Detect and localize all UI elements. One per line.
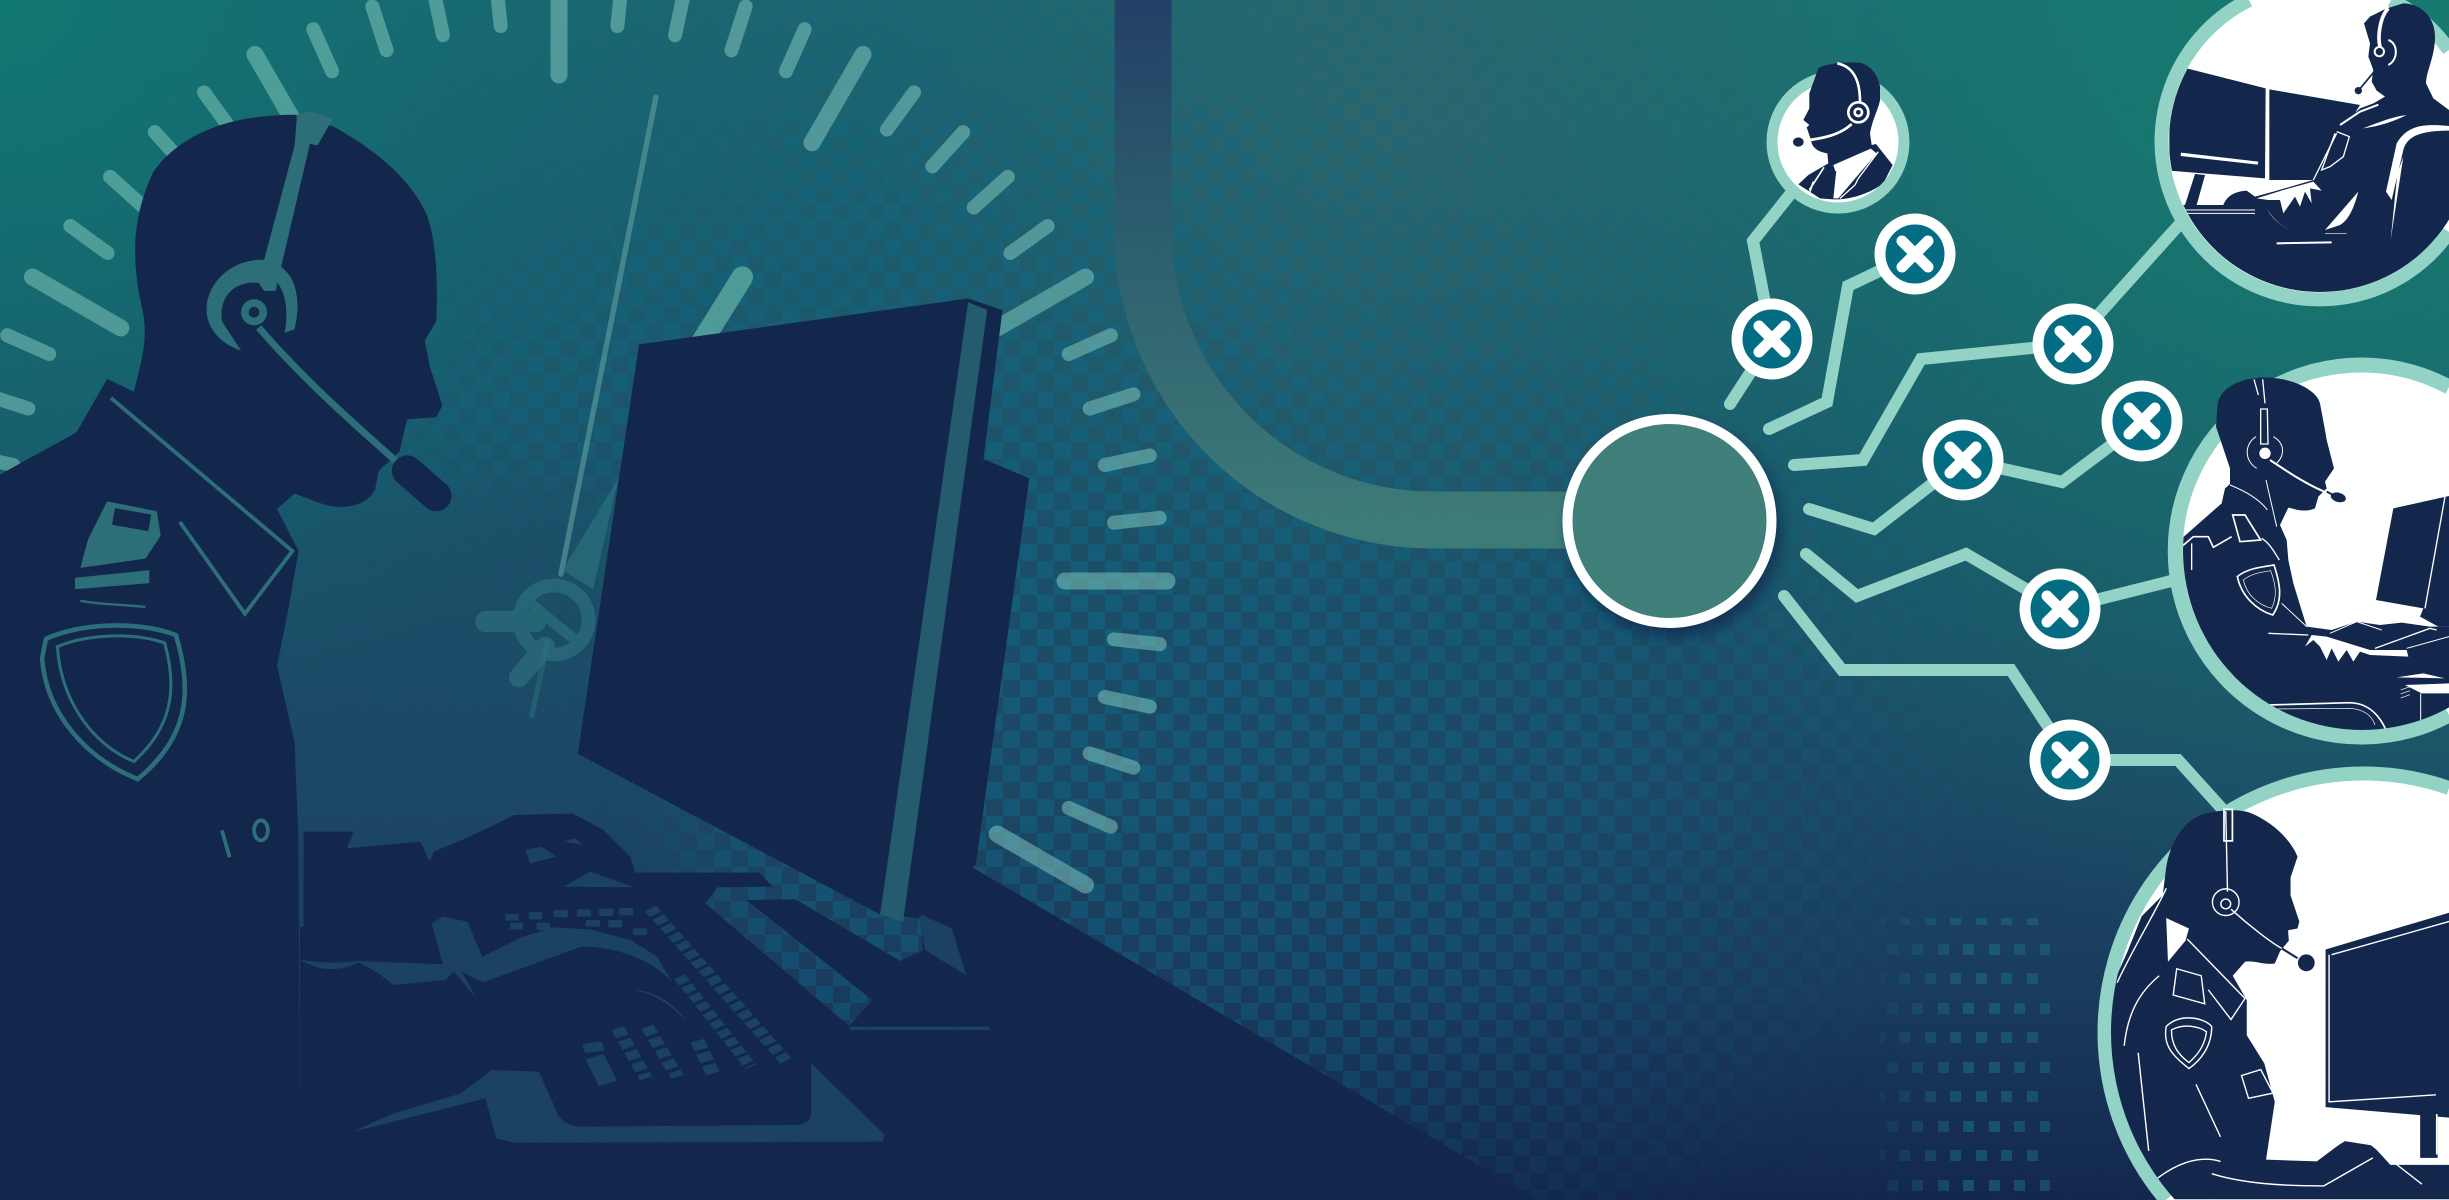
marker 7	[2035, 725, 2105, 795]
keyboard keys	[505, 908, 647, 935]
central hub circle	[1568, 419, 1782, 637]
halftone pattern	[500, 150, 2050, 1191]
mouse pad and pen	[354, 1063, 885, 1143]
portrait: dispatcher in uniform at keyboard	[2163, 365, 2449, 747]
clock hands	[486, 97, 742, 716]
background band into hub	[1143, 0, 1600, 520]
portrait: woman dispatcher	[2075, 773, 2449, 1200]
clock dial ticks	[0, 0, 1167, 885]
marker 5	[2107, 386, 2177, 456]
desk, arm and hand	[300, 813, 1538, 1200]
portrait: dispatcher with dual monitors	[2162, 0, 2449, 300]
marker 6	[2025, 574, 2095, 644]
dispatcher at the desk, dark silhouette	[0, 111, 1538, 1200]
blocked connection markers	[1737, 219, 2177, 795]
forearm highlights	[300, 917, 673, 998]
marker 1	[1737, 304, 1807, 374]
uniform details	[42, 398, 292, 857]
portrait: small headset agent	[1772, 62, 1904, 208]
man silhouette	[0, 111, 442, 1200]
connector lines	[1730, 192, 2225, 812]
marker 2	[1880, 219, 1950, 289]
monitor stand wedge	[918, 913, 966, 975]
hand highlights	[300, 832, 989, 1030]
marker 4	[1928, 425, 1998, 495]
computer monitor	[578, 298, 1029, 922]
marker 3	[2038, 309, 2108, 379]
shoulder patch and headset	[75, 111, 333, 589]
